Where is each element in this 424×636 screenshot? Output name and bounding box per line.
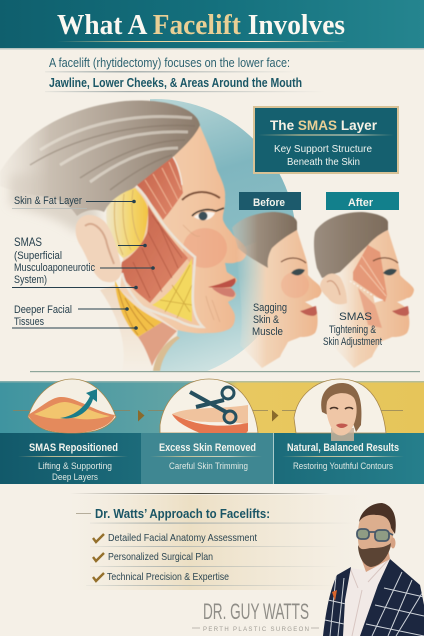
intro text: A facelift (rhytidectomy) focuses on the lower face: [49, 56, 290, 70]
step 1 icon [28, 379, 116, 433]
hair [0, 100, 200, 216]
portrait: Dr. Watts [323, 503, 424, 636]
label: skin and fat layer: Skin & Fat Layer [14, 195, 82, 207]
step 3 text: Restoring Youthful Contours [293, 461, 393, 472]
face skin [120, 126, 247, 333]
label: deeper facial tissues: Tissues [14, 316, 44, 328]
fat layer (yellow upper) [106, 188, 148, 258]
step 3 icon [294, 379, 386, 441]
ear [390, 538, 396, 548]
before caption [252, 302, 287, 338]
step 3 text [273, 433, 424, 484]
after badge: After [348, 197, 374, 209]
step 1 text: SMAS Repositioned [29, 442, 118, 454]
upper muscle [136, 157, 183, 220]
checklist item 1 [90, 532, 340, 547]
checklist item 3: Technical Precision & Expertise [107, 571, 229, 583]
before caption: Skin & [253, 314, 280, 326]
shirt [343, 558, 390, 636]
before badge: Before [253, 197, 285, 209]
label: SMAS: (Superficial [14, 250, 62, 262]
beard [358, 543, 391, 567]
intro text: Jawline, Lower Cheeks, & Areas Around the Mouth [49, 76, 302, 90]
step text panels [0, 433, 424, 484]
three step band [0, 379, 424, 441]
hair haze behind the head [10, 170, 100, 232]
callout: SMAS layer: The SMAS Layer [270, 117, 378, 133]
neck [100, 285, 178, 371]
jacket [323, 559, 424, 636]
label: deeper facial tissues: Deeper Facial [14, 304, 72, 316]
callout: SMAS layer [254, 107, 398, 173]
intro text [45, 56, 325, 92]
lower yellow cheek fat [152, 258, 192, 322]
checklist item 2 [90, 551, 340, 567]
label: deeper facial tissues [12, 304, 138, 330]
approach section [70, 493, 370, 590]
label: SMAS [12, 235, 155, 289]
after panel [314, 192, 414, 368]
after caption [323, 311, 382, 348]
neck [331, 428, 354, 441]
step 2 icon [160, 379, 258, 433]
logo: Dr. Guy Watts [192, 599, 319, 633]
before badge [239, 192, 301, 210]
before caption: Sagging [253, 302, 287, 314]
step 3 text: Natural, Balanced Results [287, 442, 399, 454]
lift arrow [350, 281, 375, 297]
step 1 text: Lifting & Supporting [38, 461, 112, 472]
before panel [232, 192, 322, 368]
checklist item 2: Personalized Surgical Plan [108, 551, 213, 563]
step 2 text: Careful Skin Trimming [169, 461, 248, 472]
step 1 text [0, 433, 141, 484]
arrow 1 [138, 410, 144, 422]
logo: Dr. Guy Watts: DR. GUY WATTS [203, 599, 309, 624]
label: SMAS: SMAS [14, 235, 42, 249]
after face [314, 212, 414, 368]
glasses [357, 529, 393, 541]
neck muscle [138, 322, 177, 366]
anatomy labels [12, 195, 155, 330]
after caption: Skin Adjustment [323, 336, 382, 348]
teal circle backdrop [150, 99, 294, 371]
SMAS muscle [121, 205, 188, 303]
header banner [0, 0, 424, 50]
ear [76, 215, 122, 282]
checklist item 1: Detailed Facial Anatomy Assessment [108, 532, 257, 544]
callout: SMAS layer: Beneath the Skin [287, 156, 360, 168]
after caption: Tightening & [329, 324, 377, 336]
after badge [326, 192, 399, 210]
neck [360, 548, 390, 572]
label: skin and fat layer [12, 195, 136, 209]
label: SMAS: System) [14, 274, 47, 286]
before caption: Muscle [252, 326, 283, 338]
label: SMAS: Musculoaponeurotic [14, 262, 95, 274]
white fascia edge [122, 186, 203, 327]
approach heading: Dr. Watts’ Approach to Facelifts: [95, 506, 270, 521]
title: What A Facelift Involves [57, 9, 345, 41]
before face [232, 212, 322, 368]
step 2 text: Excess Skin Removed [159, 442, 256, 454]
checklist item 3 [86, 571, 336, 586]
logo: Dr. Guy Watts: PERTH PLASTIC SURGEON [203, 627, 309, 633]
main face anatomy illustration [0, 100, 247, 371]
head [358, 509, 394, 566]
after ear [320, 274, 347, 304]
pocket square [332, 590, 337, 601]
after caption: SMAS [339, 311, 372, 323]
arrow 2 [272, 410, 278, 422]
lips [208, 278, 236, 288]
lower rear yellow [115, 280, 162, 337]
muscle bands [353, 245, 387, 302]
step 1 text: Deep Layers [52, 472, 98, 483]
eye and brow [182, 192, 220, 200]
callout: SMAS layer: Key Support Structure [274, 143, 372, 155]
step 2 text [141, 433, 273, 484]
hair [359, 503, 396, 534]
